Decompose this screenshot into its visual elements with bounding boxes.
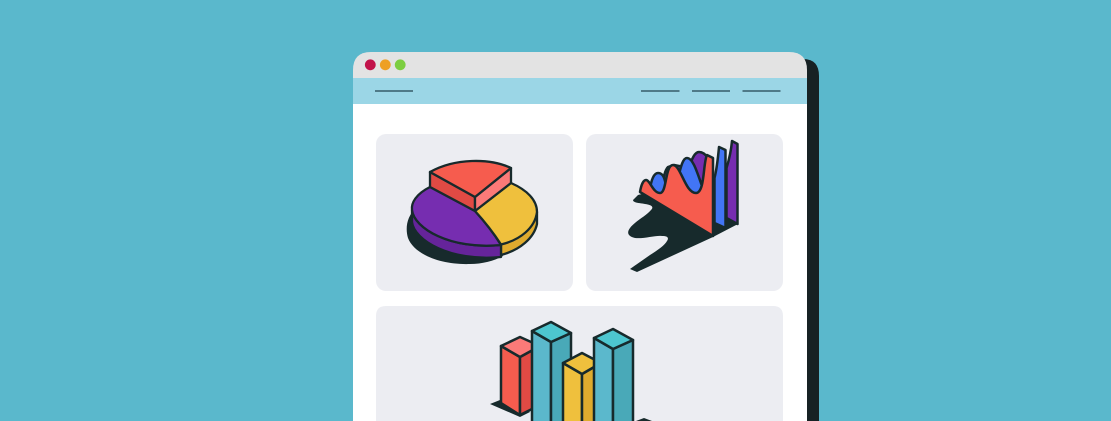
browser window — [353, 52, 807, 421]
red wedge top — [430, 161, 511, 197]
yellow bar — [563, 353, 601, 421]
blue side strip — [714, 147, 726, 228]
title bar — [353, 52, 807, 78]
window body — [353, 90, 807, 421]
panel background — [376, 306, 783, 421]
purple back layer — [662, 152, 708, 195]
panel: area chart — [586, 134, 783, 291]
bar tip at bottom edge — [636, 418, 652, 421]
red wedge left side — [430, 172, 475, 211]
red wedge right side — [475, 168, 511, 211]
bar shadow — [490, 400, 530, 417]
yellow slice top — [475, 183, 537, 244]
yellow slice side — [501, 212, 537, 255]
navigation bar — [353, 78, 807, 104]
blue middle layer — [650, 158, 702, 198]
purple slice top — [412, 187, 501, 246]
tall teal bar — [532, 322, 571, 421]
red front layer — [640, 155, 713, 236]
red bar — [501, 337, 540, 415]
purple slice side — [412, 210, 501, 258]
panel: bar chart — [376, 306, 783, 421]
area chart shadow — [628, 192, 738, 272]
menu lines — [641, 90, 780, 92]
logo line — [375, 90, 413, 92]
pie shadow — [407, 208, 503, 264]
window control dots — [365, 59, 406, 70]
panel background — [586, 134, 783, 291]
window drop shadow — [790, 59, 819, 421]
panel: pie chart — [376, 134, 573, 291]
purple side strip — [726, 141, 738, 224]
panel background — [376, 134, 573, 291]
right teal bar — [594, 329, 633, 421]
